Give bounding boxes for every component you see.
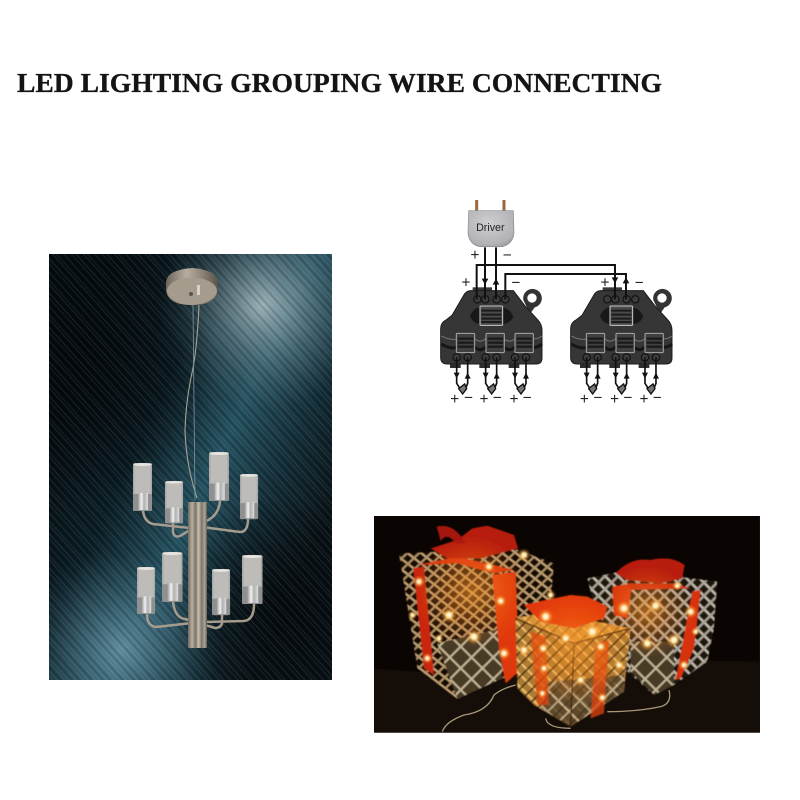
- gift box artwork, softened: [399, 526, 717, 727]
- polarity labels: −: [493, 390, 502, 407]
- connector modules: [441, 287, 672, 394]
- polarity labels: +: [601, 274, 610, 291]
- right gift box: [587, 558, 717, 695]
- ribbons: [413, 567, 434, 675]
- polarity labels: +: [471, 247, 480, 264]
- polarity labels: −: [635, 274, 644, 291]
- panel: wiring diagram: [441, 200, 672, 408]
- polarity labels: −: [523, 390, 532, 407]
- panel: lit gift boxes photo: [374, 516, 760, 733]
- glass cups: [133, 452, 263, 615]
- polarity labels: +: [640, 391, 649, 408]
- polarity labels: [450, 247, 662, 408]
- warm light wash: [414, 535, 694, 705]
- streaked teal background: [49, 254, 332, 680]
- ceiling canopy: [166, 268, 218, 305]
- front centre gift box: [516, 595, 631, 727]
- polarity labels: +: [610, 391, 619, 408]
- driver plug: Driver: [476, 222, 505, 234]
- polarity labels: −: [594, 390, 603, 407]
- central column: [188, 502, 207, 648]
- connecting wires: [477, 247, 626, 299]
- polarity labels: +: [580, 391, 589, 408]
- power cords: [442, 685, 670, 732]
- wire arrows: [482, 277, 629, 285]
- polarity labels: −: [503, 247, 512, 264]
- polarity labels: +: [450, 391, 459, 408]
- dark background: [374, 516, 760, 733]
- chandelier arms: [143, 501, 254, 628]
- polarity labels: +: [480, 391, 489, 408]
- polarity labels: −: [512, 274, 521, 291]
- panel: chandelier photo: [49, 254, 332, 680]
- suspension wires: [185, 305, 199, 500]
- polarity labels: −: [464, 390, 473, 407]
- polarity labels: −: [624, 390, 633, 407]
- light bulbs: [408, 548, 700, 703]
- title: LED LIGHTING GROUPING WIRE CONNECTING: [17, 68, 662, 98]
- polarity labels: −: [653, 390, 662, 407]
- polarity labels: +: [510, 391, 519, 408]
- large left gift box: [399, 526, 554, 699]
- polarity labels: +: [462, 274, 471, 291]
- driver plug: [468, 200, 514, 247]
